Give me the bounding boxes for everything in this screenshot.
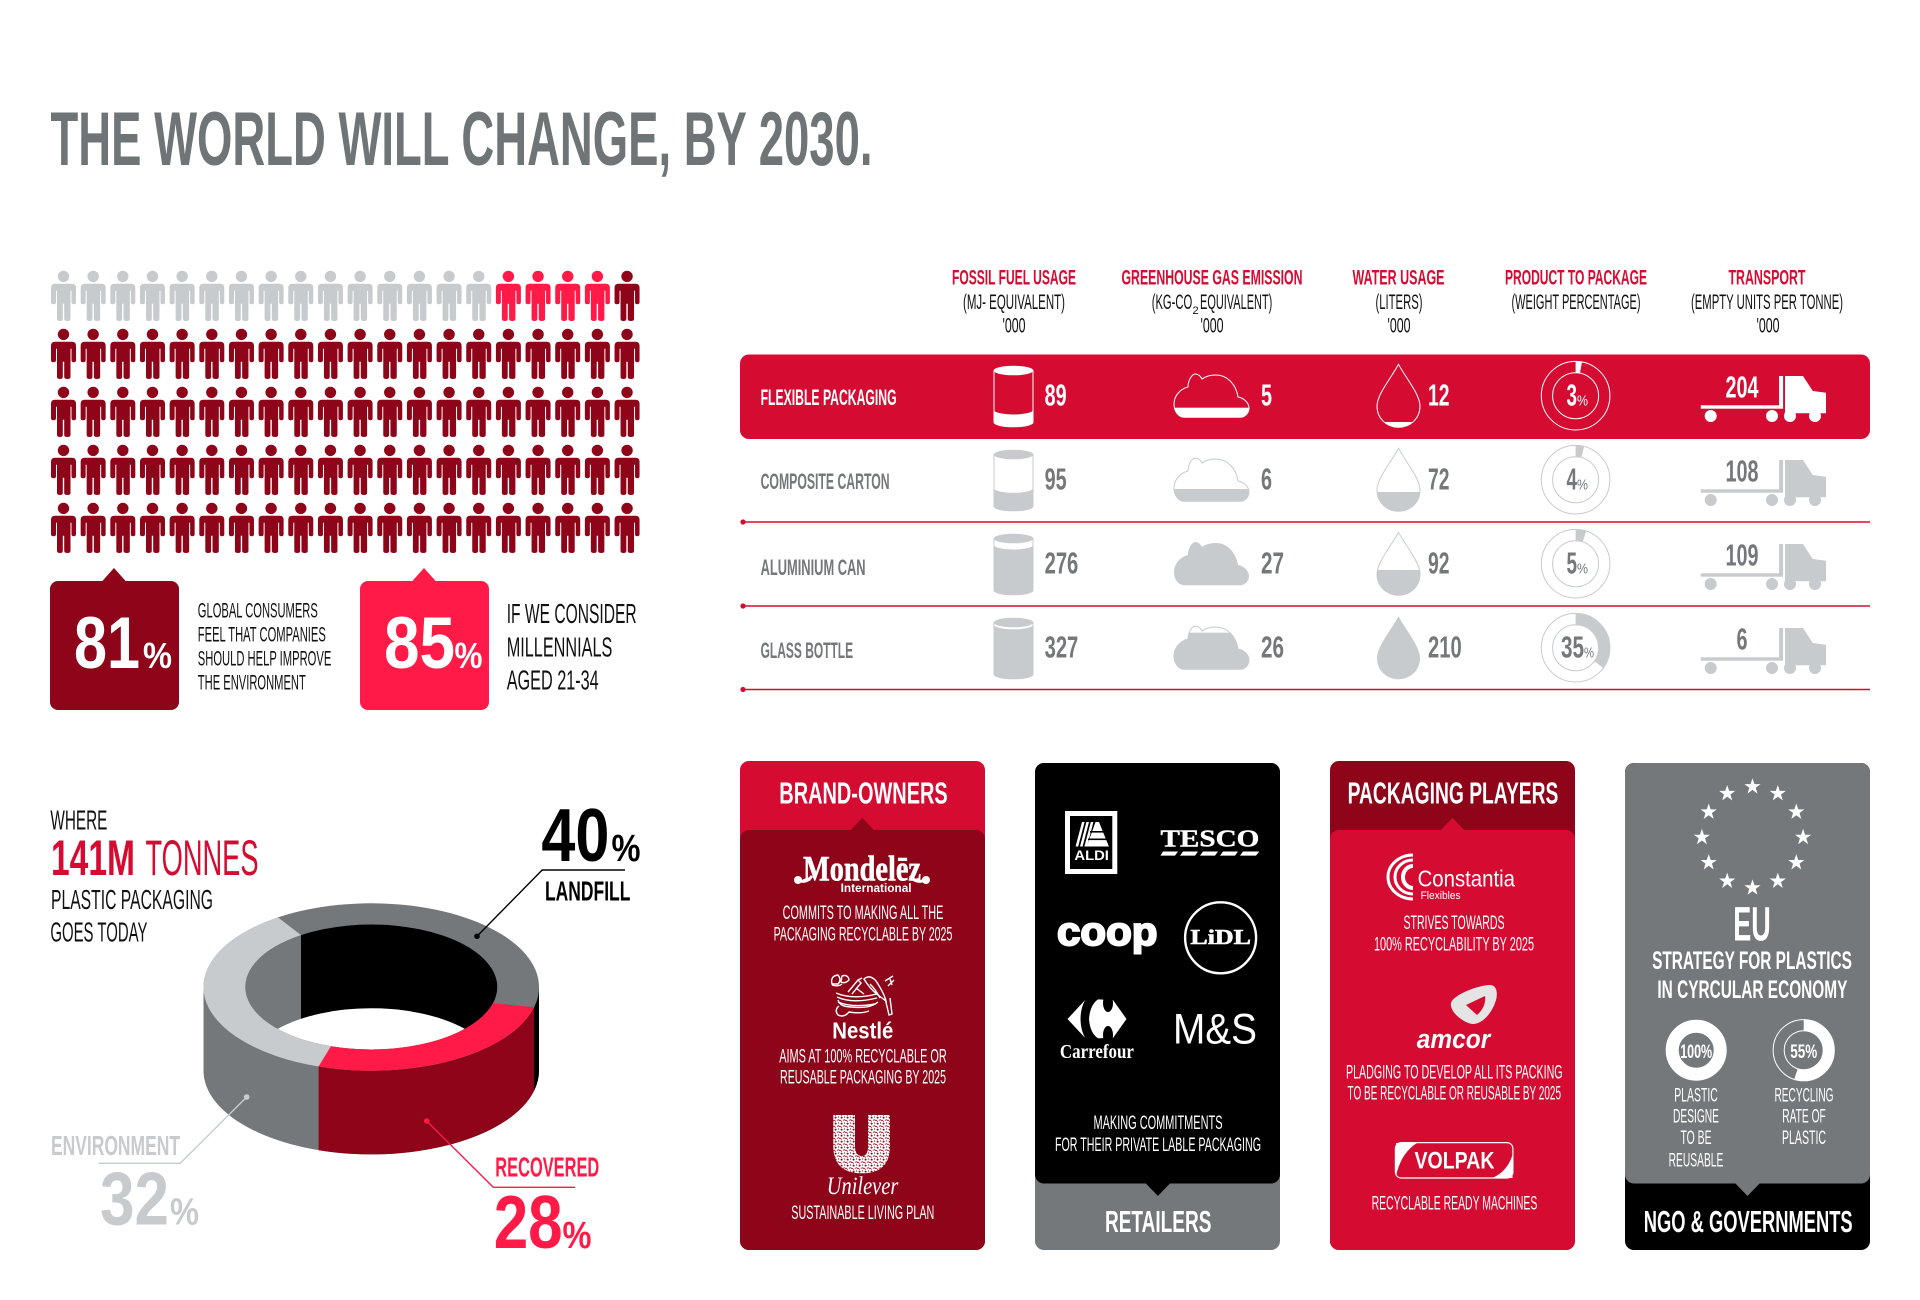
text: Amcor commitment: PLADGING TO DEVELOP ALL ITS PACKING	[1346, 1063, 1563, 1084]
callout: 85% millennials: %	[454, 635, 482, 676]
text: recycling rate: RECYCLING	[1774, 1085, 1834, 1106]
text: where 141M tonnes	[50, 805, 259, 948]
table row: composite carton: 95	[1045, 461, 1067, 496]
text: where 141M tonnes: 141M	[51, 830, 135, 886]
text: global consumers	[198, 600, 331, 695]
table row: aluminium can: ALUMINIUM CAN	[761, 555, 866, 580]
logo: Constantia Flexibles: Constantia	[1418, 865, 1515, 891]
text: recycling rate	[1774, 1085, 1834, 1149]
text: Nestle commitment	[779, 1046, 947, 1088]
text: global consumers: SHOULD HELP IMPROVE	[198, 648, 331, 671]
label: landfill 40%: LANDFILL	[545, 876, 630, 907]
label: recovered 28%	[424, 1118, 599, 1264]
label: environment 32%: %	[170, 1191, 199, 1233]
label: environment 32%: ENVIRONMENT	[51, 1130, 180, 1161]
table row: glass bottle: %	[1584, 644, 1594, 661]
panel: brand-owners: BRAND-OWNERS	[779, 775, 948, 810]
label: environment 32%: 32	[100, 1156, 169, 1240]
logo: Mondelez	[794, 848, 930, 895]
table column headers: FOSSIL FUEL USAGE	[952, 267, 1076, 290]
logo: Aldi: ALDI	[1074, 847, 1109, 863]
table row: glass bottle: 327	[1045, 629, 1078, 664]
callout: 81% global consumers	[50, 568, 179, 710]
callout: 81% global consumers: 81	[74, 603, 140, 684]
icon: EU stars	[1694, 778, 1811, 895]
logo: Volpak: VOLPAK	[1414, 1148, 1495, 1175]
panel: brand-owners	[740, 761, 985, 1250]
text: millennials: AGED 21-34	[507, 664, 599, 695]
logo: M&S: M&S	[1173, 1006, 1257, 1054]
text: plastic design: TO BE	[1680, 1128, 1712, 1149]
table column headers: WATER USAGE	[1352, 267, 1444, 290]
logo: Coop: coop	[1057, 910, 1158, 954]
logo: Constantia Flexibles: Flexibles	[1421, 890, 1461, 902]
text: retailers commitment: FOR THEIR PRIVATE LABLE PACKAGING	[1055, 1135, 1261, 1156]
callout: 85% millennials: 85	[384, 603, 455, 684]
text: Constantia commitment	[1374, 913, 1534, 955]
pictogram: 100 people	[51, 271, 640, 553]
heading: EU strategy	[1652, 898, 1852, 1004]
table column headers: '000	[1756, 315, 1780, 338]
table row: composite carton: 4	[1566, 461, 1577, 496]
text: global consumers: GLOBAL CONSUMERS	[198, 600, 318, 623]
text: Mondelez commitment	[774, 903, 952, 946]
text: where 141M tonnes: TONNES	[146, 830, 258, 886]
text: Nestle commitment: REUSABLE PACKAGING BY 2025	[780, 1067, 946, 1088]
table column headers: (WEIGHT PERCENTAGE)	[1512, 291, 1640, 314]
table row: flexible packaging: %	[1577, 392, 1588, 409]
table row: glass bottle: 210	[1428, 629, 1462, 664]
text: global consumers: THE ENVIRONMENT	[198, 672, 306, 695]
table row: flexible packaging: FLEXIBLE PACKAGING	[761, 385, 897, 410]
table row: composite carton: 108	[1726, 454, 1758, 489]
chart: 3D ring	[203, 903, 539, 1154]
table row: composite carton: 6	[1261, 461, 1272, 496]
chart: 55% donut: 55%	[1790, 1042, 1817, 1063]
text: recycling rate: RATE OF	[1782, 1107, 1826, 1128]
text: Volpak machines: RECYCLABLE READY MACHINES	[1372, 1194, 1537, 1215]
text: where 141M tonnes: PLASTIC PACKAGING	[51, 884, 213, 915]
label: landfill 40%	[474, 793, 640, 939]
heading: EU strategy: EU	[1733, 898, 1771, 952]
text: Mondelez commitment: PACKAGING RECYCLABLE BY 2025	[774, 924, 952, 946]
table row: aluminium can: 276	[1045, 545, 1078, 580]
logo: Constantia Flexibles	[1388, 855, 1515, 902]
table row: glass bottle: 35	[1561, 629, 1584, 664]
text: Constantia commitment: STRIVES TOWARDS	[1404, 913, 1504, 934]
logo: Nestle: Nestlé	[832, 1017, 893, 1043]
table column headers: (MJ- EQUIVALENT)	[963, 291, 1065, 314]
table row: composite carton: 72	[1428, 461, 1450, 496]
panel: retailers	[1035, 763, 1280, 1250]
table row: aluminium can: 27	[1261, 545, 1284, 580]
text: Amcor commitment: TO BE RECYCLABLE OR REUSABLE BY 2025	[1348, 1084, 1561, 1105]
logo: Nestle	[832, 975, 894, 1043]
table column headers: '000	[1002, 315, 1026, 338]
text: where 141M tonnes: GOES TODAY	[50, 917, 148, 948]
table row: composite carton: %	[1577, 476, 1588, 493]
table row: flexible packaging: 3	[1566, 377, 1577, 412]
text: Constantia commitment: 100% RECYCLABILITY BY 2025	[1374, 934, 1534, 955]
text: Unilever plan: SUSTAINABLE LIVING PLAN	[791, 1203, 934, 1224]
panel: packaging players: PACKAGING PLAYERS	[1348, 776, 1558, 810]
title: THE WORLD WILL CHANGE, BY 2030.	[50, 97, 872, 182]
table row: flexible packaging: 5	[1261, 377, 1272, 412]
table row: glass bottle: 6	[1736, 622, 1748, 657]
table row: aluminium can: 92	[1428, 545, 1450, 580]
text: Mondelez commitment: COMMITS TO MAKING ALL THE	[783, 903, 943, 924]
table column headers: (KG-CO	[1152, 291, 1192, 314]
logo: Unilever: Unilever	[827, 1173, 899, 1200]
logo: Volpak	[1395, 1143, 1513, 1178]
label: recovered 28%: RECOVERED	[495, 1152, 599, 1183]
chart: 55% donut	[1773, 1020, 1834, 1081]
text: where 141M tonnes: WHERE	[50, 805, 107, 836]
table column headers: (LITERS)	[1376, 291, 1422, 314]
text: retailers commitment: MAKING COMMITMENTS	[1094, 1113, 1222, 1134]
text: Amcor commitment	[1346, 1063, 1563, 1105]
table row: glass bottle: 26	[1261, 629, 1284, 664]
label: landfill 40%: 40	[541, 793, 609, 877]
table row: flexible packaging: 204	[1726, 370, 1759, 405]
text: plastic design: REUSABLE	[1669, 1151, 1723, 1172]
text: plastic design	[1669, 1085, 1723, 1172]
panel: packaging players	[1330, 761, 1575, 1250]
logo: Carrefour: Carrefour	[1060, 1041, 1134, 1063]
table row: aluminium can	[761, 529, 1826, 598]
table column headers: '000	[1200, 315, 1224, 338]
table row: aluminium can: %	[1577, 560, 1588, 577]
table column headers: GREENHOUSE GAS EMISSION	[1122, 267, 1302, 290]
label: recovered 28%: %	[562, 1215, 592, 1257]
table row: glass bottle	[761, 613, 1826, 682]
text: plastic design: PLASTIC	[1674, 1085, 1718, 1106]
table column headers: 2	[1192, 305, 1199, 317]
label: recovered 28%: 28	[494, 1180, 563, 1264]
label: landfill 40%: %	[612, 828, 640, 870]
text: millennials: MILLENNIALS	[507, 632, 612, 663]
callout: 85% millennials	[360, 568, 489, 710]
table row: flexible packaging: 12	[1428, 377, 1450, 412]
table column headers: TRANSPORT	[1728, 267, 1806, 290]
text: plastic design: DESIGNE	[1673, 1107, 1719, 1128]
table row: composite carton: COMPOSITE CARTON	[761, 469, 890, 494]
logo: Unilever	[827, 1115, 899, 1200]
logo: Amcor	[1417, 985, 1497, 1054]
chart: 100% donut	[1672, 1026, 1720, 1074]
logo: Mondelez: Mondelēz	[803, 848, 921, 888]
logo: Carrefour	[1060, 994, 1134, 1063]
logo: Mondelez: International	[841, 883, 912, 895]
text: global consumers: FEEL THAT COMPANIES	[198, 624, 326, 647]
table column headers: PRODUCT TO PACKAGE	[1505, 267, 1647, 290]
table row: glass bottle: GLASS BOTTLE	[761, 638, 853, 663]
heading: retailers: RETAILERS	[1105, 1204, 1211, 1239]
logo: Amcor: amcor	[1417, 1024, 1492, 1054]
logo: Aldi	[1068, 814, 1115, 872]
text: Nestle commitment: AIMS AT 100% RECYCLABLE OR	[779, 1046, 947, 1067]
table row: composite carton	[761, 445, 1826, 514]
text: millennials	[507, 598, 637, 695]
text: millennials: IF WE CONSIDER	[507, 598, 637, 629]
text: retailers commitment	[1055, 1113, 1261, 1156]
table column headers: '000	[1388, 315, 1410, 338]
table row: flexible packaging	[740, 354, 1870, 439]
logo: Tesco: TESCO	[1160, 826, 1259, 852]
logo: Lidl: LiDL	[1190, 925, 1251, 949]
logo: Lidl	[1185, 902, 1256, 973]
table row: aluminium can: 5	[1566, 545, 1577, 580]
table row: aluminium can: 109	[1726, 538, 1758, 573]
panel: NGO and governments	[1625, 763, 1870, 1250]
chart: 100% donut: 100%	[1680, 1042, 1712, 1063]
text: recycling rate: PLASTIC	[1782, 1128, 1826, 1149]
callout: 81% global consumers: %	[143, 635, 172, 676]
table column headers: EQUIVALENT)	[1200, 291, 1272, 314]
label: environment 32%	[51, 1094, 250, 1240]
table column headers	[952, 267, 1843, 338]
table row: flexible packaging: 89	[1045, 377, 1067, 412]
